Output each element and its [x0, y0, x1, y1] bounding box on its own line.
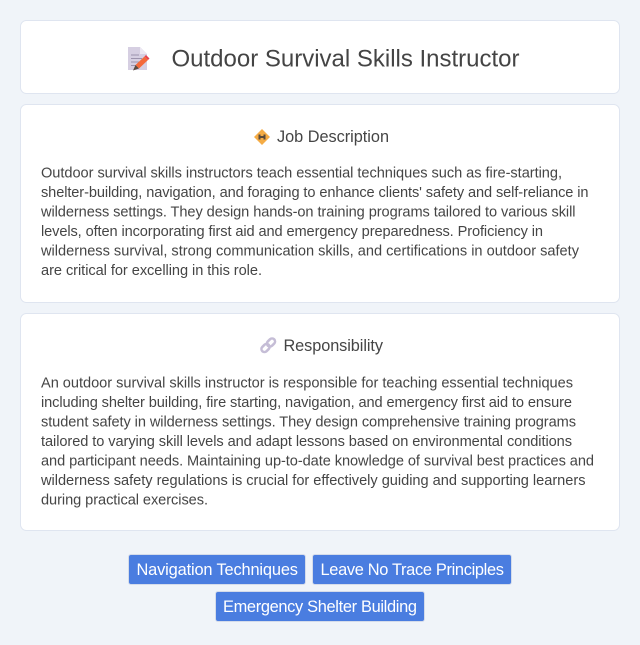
heading: responsibility: Responsibility — [284, 337, 384, 355]
text: job description body: shelter-building, navigation, and foraging to enhance clients' safety and self-reliance in — [41, 185, 588, 201]
text: responsibility body: tailored to varying skill levels and adapt lessons based on environmental conditions — [41, 434, 572, 450]
text: responsibility body: An outdoor survival skills instructor is responsible for teaching essential techniques — [41, 376, 573, 392]
text: job description body: are critical for excelling in this role. — [41, 263, 262, 279]
text: responsibility body — [40, 376, 594, 508]
text: responsibility body: and participant needs. Maintaining up-to-date knowledge of survival best practices and — [41, 454, 594, 470]
icon: chain link — [260, 337, 276, 353]
panel: responsibility — [20, 314, 620, 530]
tag: emergency shelter building — [216, 592, 424, 622]
tag: navigation techniques — [128, 554, 306, 584]
text: job description body: Outdoor survival skills instructors teach essential techniques such as fire-starting, — [41, 166, 562, 182]
icon: warning diamond — [254, 129, 270, 145]
panel: title card — [20, 20, 620, 94]
icon: document with pencil — [128, 47, 150, 70]
tag: emergency shelter building: Emergency Shelter Building — [223, 598, 417, 616]
heading: job description: Job Description — [277, 128, 389, 146]
text: responsibility body: wilderness safety regulations is crucial for effectively guiding and supporting learners — [40, 473, 586, 489]
text: job description body: wilderness survival, strong communication skills, and certifications in outdoor safety — [40, 244, 580, 260]
title: Outdoor Survival Skills Instructor — [172, 46, 520, 72]
tag: navigation techniques: Navigation Techniques — [136, 561, 298, 579]
text: responsibility body: during practical exercises. — [41, 492, 208, 508]
text: responsibility body: student safety in wilderness settings. They design comprehensive training programs — [41, 414, 576, 430]
text: job description body: levels, often incorporating first aid and emergency preparedness. Proficiency in — [41, 224, 543, 240]
text: job description body: wilderness settings. They design hands-on training programs tailored to various skill — [40, 204, 576, 220]
tag: leave no trace principles: Leave No Trace Principles — [320, 561, 504, 579]
panel: job description — [20, 104, 620, 302]
text: responsibility body: including shelter building, fire starting, navigation, and emergency first aid to ensure — [41, 395, 572, 411]
tag: leave no trace principles — [312, 554, 512, 584]
text: job description body — [40, 166, 588, 279]
